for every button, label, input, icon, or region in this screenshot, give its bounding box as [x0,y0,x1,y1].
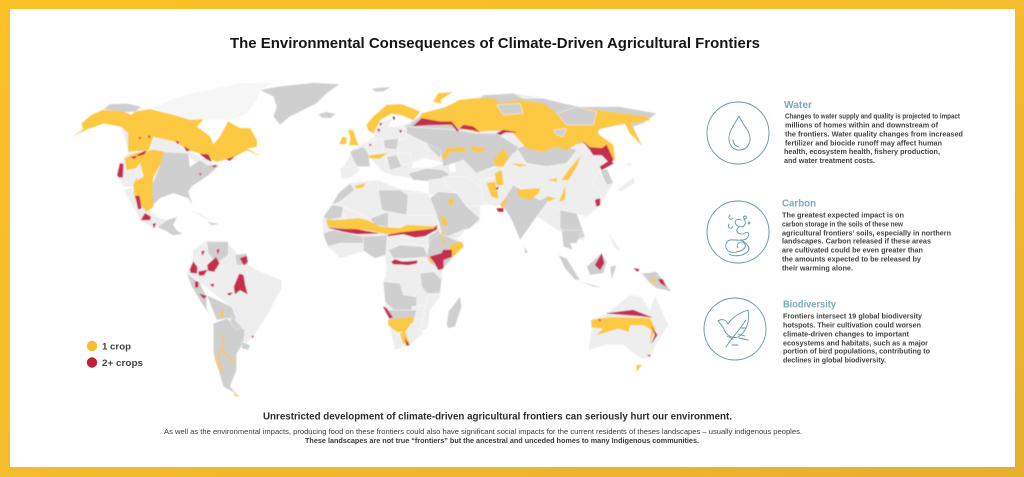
panel: carbon [782,198,951,273]
footer text: As well as the environmental impacts, producing food on these frontiers could also have significant social impacts for the current residents of theses landscapes – usually indigenous peoples. [164,427,802,436]
title: The Environmental Consequences of Climate-Driven Agricultural Frontiers [230,35,760,52]
text block: biodiversity: portion of bird populations, contributing to [783,347,930,356]
map: Asia [407,93,657,240]
subheading: Unrestricted development of climate-driven agricultural frontiers can seriously hurt our environment. [263,410,732,422]
text block: biodiversity: hotspots. Their cultivation could worsen [783,321,921,330]
legend item: 2+ crops: 2+ crops [102,358,143,369]
text block: biodiversity: declines in global biodiversity. [783,356,886,365]
text block: water: and water treatment costs. [784,156,875,165]
footer text: These landscapes are not true “frontiers” but the ancestral and unceded homes to many Indigenous communities. [305,436,699,445]
text block: biodiversity: ecosystems and habitats, such as a major [783,339,928,348]
text block: carbon: agricultural frontiers’ soils, especially in northern [782,229,951,238]
heading: water: Water [784,99,812,111]
map: Europe [340,87,460,182]
map: Africa south, Southeast Asia and Oceania [383,230,672,372]
heading: carbon: Carbon [782,198,816,210]
text block: carbon: their warming alone. [782,264,853,273]
text block: carbon: carbon storage in the soils of these new [782,220,903,229]
text block: carbon: are cultivated could be even greater than [782,246,923,255]
text block: water [784,112,963,165]
text block: carbon: the amounts expected to be released by [782,255,922,264]
text block: water: Changes to water supply and quality is projected to impact [785,112,960,120]
heading: biodiversity: Biodiversity [783,298,836,310]
icon: bird on branch [704,298,766,360]
map: North America [73,83,358,236]
world map [73,83,672,396]
text block: carbon [782,211,951,273]
text block: water: the frontiers. Water quality changes from increased [785,130,963,138]
text block: biodiversity [783,312,930,365]
icon: carbon swirl [707,201,769,263]
legend [87,341,143,369]
map: South America [187,240,282,396]
map: continent silhouettes [323,93,657,350]
panel: water [784,99,963,165]
footer text [164,427,802,445]
legend item: 1 crop: 1 crop [102,342,131,352]
text block: biodiversity: Frontiers intersect 19 global biodiversity [783,312,923,321]
text block: biodiversity: climate-driven changes to important [783,330,909,339]
map: Middle East and North Africa [323,177,485,258]
icon: water drop [707,102,769,164]
text block: carbon: landscapes. Carbon released if these areas [782,237,931,246]
text block: water: fertilizer and biocide runoff may affect human [785,138,942,148]
panel: biodiversity [783,298,930,365]
text block: water: millions of homes within and downstream of [785,120,938,130]
text block: carbon: The greatest expected impact is on [782,211,904,220]
text block: water: health, ecosystem health, fishery production, [784,147,940,156]
